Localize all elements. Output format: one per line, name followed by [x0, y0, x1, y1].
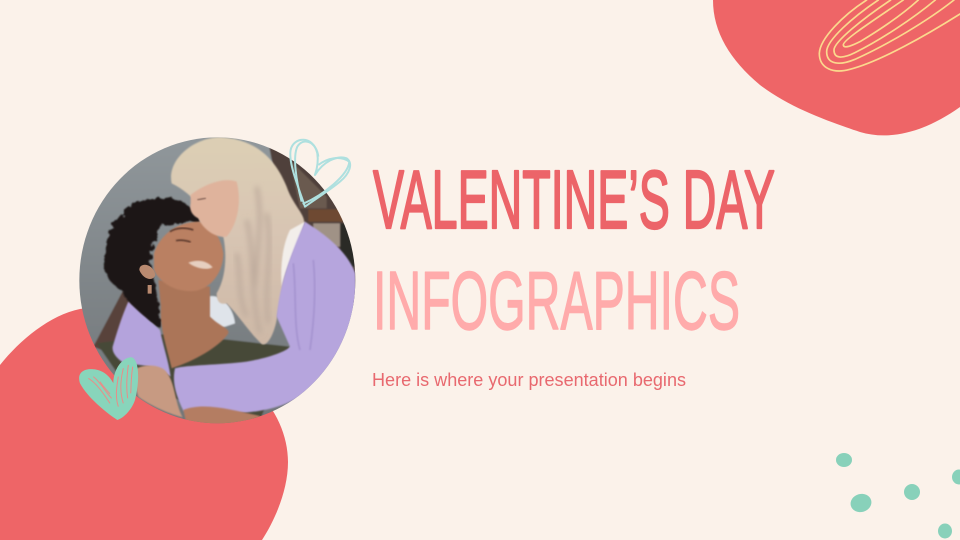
white top: [281, 222, 305, 287]
decorative mint dots: [836, 453, 960, 538]
blob: bottom left: [0, 308, 288, 540]
blonde woman's face: [190, 180, 239, 237]
photo: couple embracing: [73, 133, 360, 427]
closed eye: [197, 198, 206, 200]
eyelids and brow: [170, 228, 193, 242]
subtitle: Here is where your presentation begins: [372, 370, 686, 390]
decorative yellow nested lines: [819, 0, 960, 71]
neck and chest: [158, 280, 228, 368]
left sleeve: [113, 302, 171, 377]
purple cardigan body and arm: [174, 222, 357, 414]
ear and earring: [139, 265, 155, 294]
smiling face: [154, 222, 223, 291]
lower forearm: [183, 406, 260, 425]
blonde hair: [171, 137, 304, 344]
hair strands: [237, 187, 269, 333]
dark curly hair: [105, 197, 200, 328]
icon: scribbled mint heart: [79, 357, 138, 420]
hands: [136, 365, 183, 417]
smile and eyes: [188, 261, 213, 269]
cardigan folds: [293, 260, 315, 350]
icon: outline heart: [290, 140, 350, 207]
blob: top right: [713, 0, 960, 135]
